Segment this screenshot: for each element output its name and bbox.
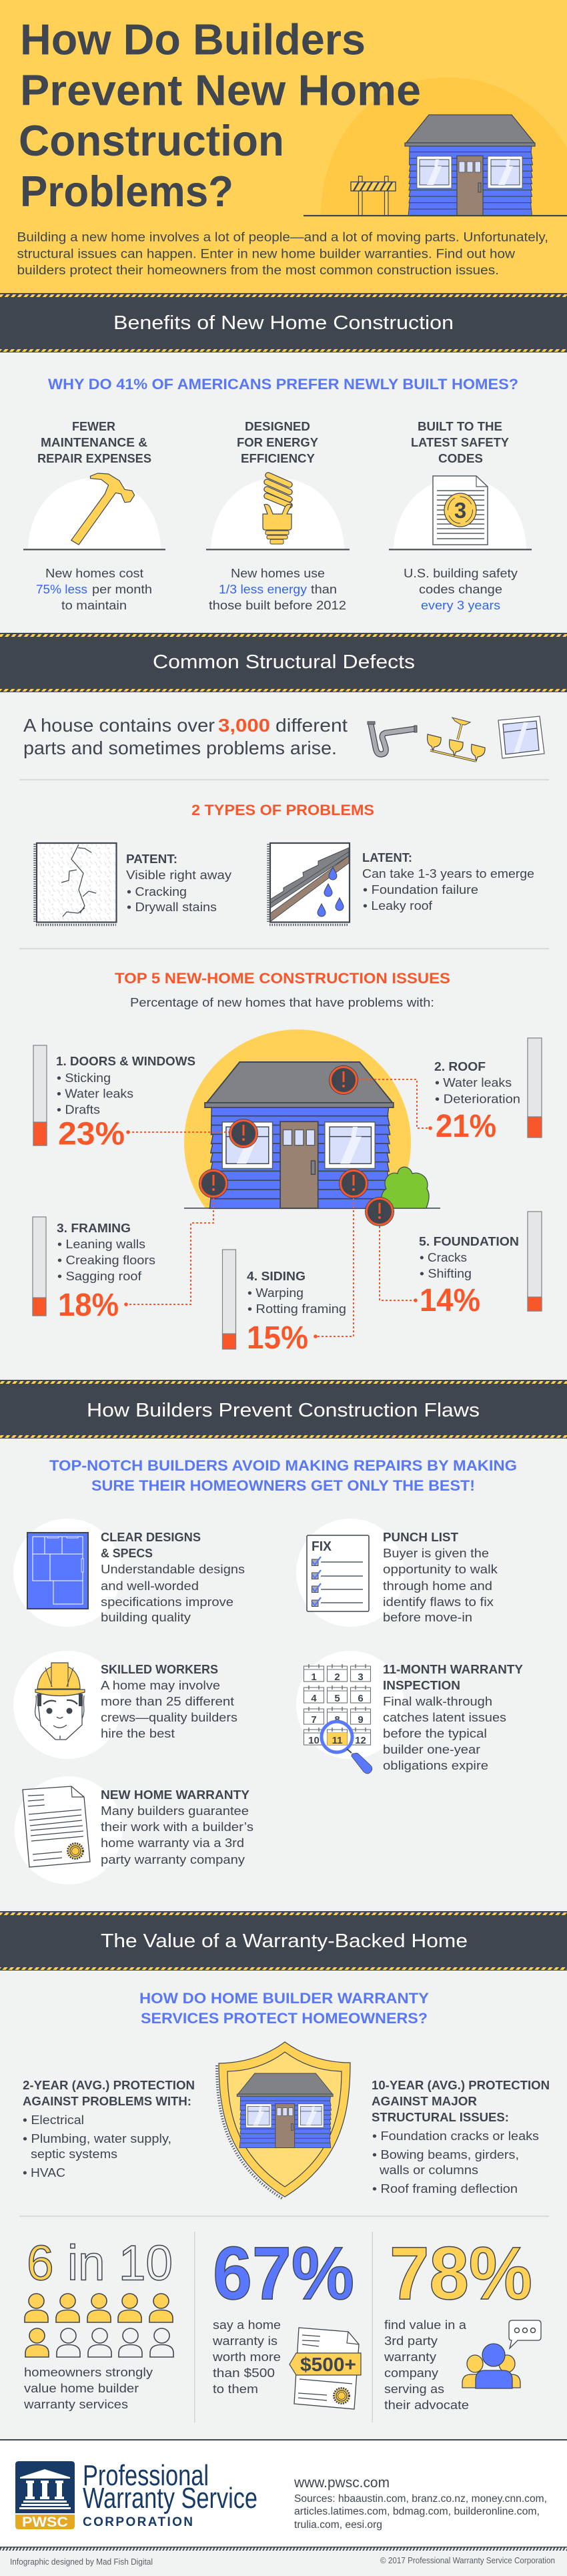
icon: checklist <box>307 1535 369 1611</box>
logo: PWSC: PWSC <box>22 2515 68 2530</box>
panel: fewer maintenance: per month <box>92 582 152 596</box>
panel: fewer maintenance: 75% less <box>36 582 87 596</box>
panel: energy efficiency: New homes use <box>231 566 325 580</box>
icon: alert framing <box>199 1170 228 1198</box>
icon: code document <box>433 476 488 545</box>
gauge 18% <box>33 1217 46 1316</box>
stat: 6 in 10: warranty services <box>23 2397 128 2411</box>
panel: siding: 15% <box>247 1320 308 1356</box>
text block: 3,000 parts: parts and sometimes problems arise. <box>23 738 337 758</box>
icon: cracked wall <box>35 843 116 925</box>
panel: 10-year protection: • Foundation cracks or leaks <box>372 2129 539 2143</box>
icon: road barrier <box>351 176 396 216</box>
panel: 11-month inspection: 11-MONTH WARRANTY <box>383 1663 523 1676</box>
icon: window <box>498 716 544 758</box>
icon: calendar grid <box>304 1664 371 1752</box>
stat: 78%: 3rd party <box>384 2334 438 2348</box>
icon: shrub <box>381 1167 429 1208</box>
icon: hammer <box>71 473 135 545</box>
text block: 3,000 parts <box>23 715 348 758</box>
panel: 11-month inspection <box>296 1651 523 1774</box>
gauge 23% <box>33 1045 47 1145</box>
stat: 78%: 78% <box>390 2232 532 2315</box>
section banner: benefits: Benefits of New Home Construction <box>113 312 454 334</box>
stat: 78%: company <box>384 2366 439 2380</box>
panel: fewer maintenance: MAINTENANCE & <box>41 436 147 449</box>
panel: foundation <box>419 1212 542 1318</box>
panel: safety codes: BUILT TO THE <box>418 420 502 433</box>
panel: safety codes: every 3 years <box>421 598 500 612</box>
gauge 21% <box>528 1038 542 1137</box>
panel: foundation: • Cracks <box>420 1250 467 1264</box>
stat: 6 in 10: homeowners strongly <box>24 2365 153 2379</box>
panel: doors and windows: • Drafts <box>57 1103 100 1116</box>
panel: fewer maintenance: New homes cost <box>45 566 143 580</box>
panel: 10-year protection: 10-YEAR (AVG.) PROTECTION <box>372 2079 550 2092</box>
icon: blueprint <box>27 1533 88 1609</box>
panel: 11-month inspection: before the typical <box>383 1726 487 1740</box>
panel: doors and windows: • Sticking <box>57 1071 111 1085</box>
panel: foundation: 14% <box>420 1283 480 1318</box>
connectors <box>124 1079 432 1338</box>
panel: skilled workers: crews—quality builders <box>101 1710 237 1724</box>
icon: calendar grid: 6 <box>358 1693 364 1704</box>
panel: latent problems: • Leaky roof <box>363 898 433 913</box>
icon: calendar grid: 3 <box>358 1671 364 1683</box>
panel: roof: • Deterioration <box>435 1092 520 1105</box>
icon: calendar grid: 4 <box>311 1693 317 1704</box>
icon: shield with house <box>217 2042 350 2199</box>
icon: code document: 3 <box>454 498 466 523</box>
icon: calendar grid: 7 <box>311 1714 317 1726</box>
panel: patent problems: PATENT: <box>126 852 177 866</box>
panel: skilled workers <box>13 1651 237 1759</box>
header background dome <box>320 77 567 216</box>
panel: framing <box>33 1217 155 1323</box>
footer panel <box>0 2439 567 2547</box>
stat: 78%: warranty <box>384 2350 437 2364</box>
chart: house with problem areas <box>124 1029 440 1338</box>
panel: punch list: through home and <box>383 1579 492 1593</box>
panel: 2-year protection: 2-YEAR (AVG.) PROTECTION <box>23 2079 195 2092</box>
stat: 67% <box>212 2232 361 2409</box>
panel: roof: • Water leaks <box>435 1075 512 1089</box>
panel: punch list: before move-in <box>383 1610 472 1624</box>
panel: 10-year protection: walls or columns <box>379 2163 478 2177</box>
stat: 6 in 10 <box>23 2235 173 2411</box>
icon: calendar grid: 2 <box>334 1671 340 1683</box>
panel: siding <box>223 1250 346 1356</box>
panel: clear designs: Understandable designs <box>101 1562 245 1576</box>
icon: people grid <box>25 2294 173 2357</box>
panel: framing: • Sagging roof <box>57 1269 142 1283</box>
panel: 2-year protection: septic systems <box>31 2147 117 2161</box>
panel: siding: • Warping <box>247 1286 304 1300</box>
panel: new home warranty: Many builders guarantee <box>101 1804 249 1818</box>
panel: energy efficiency <box>206 420 350 612</box>
panel: fewer maintenance: to maintain <box>61 598 127 612</box>
panel: foundation: 5. FOUNDATION <box>419 1235 519 1248</box>
icon: calendar grid: 5 <box>334 1693 340 1704</box>
panel: doors and windows: 23% <box>58 1116 125 1152</box>
icon: calendar grid: 9 <box>358 1714 364 1726</box>
icon: light bulb <box>263 475 292 544</box>
panel: latent problems: • Foundation failure <box>363 882 478 896</box>
panel: punch list: Buyer is given the <box>383 1546 489 1560</box>
icon: calendar grid: 11 <box>332 1735 342 1746</box>
heading: top-notch builders: SURE THEIR HOMEOWNERS GET ONLY THE BEST! <box>91 1477 475 1494</box>
section banner: defects <box>0 633 567 692</box>
icon: $500+ certificate <box>290 2328 361 2409</box>
heading: why 41%: WHY DO 41% OF AMERICANS PREFER NEWLY BUILT HOMES? <box>48 376 518 393</box>
logo wordmark: CORPORATION <box>83 2515 193 2529</box>
logo wordmark <box>83 2459 257 2529</box>
panel: clear designs: specifications improve <box>101 1595 233 1609</box>
panel: safety codes: CODES <box>438 452 483 465</box>
credit line: Infographic designed by Mad Fish Digital <box>10 2557 153 2567</box>
panel: fewer maintenance: FEWER <box>72 420 115 433</box>
heading: top-notch builders <box>49 1457 517 1494</box>
panel: 10-year protection: STRUCTURAL ISSUES: <box>372 2111 509 2124</box>
panel: energy efficiency: 1/3 less energy <box>219 582 308 596</box>
panel: 11-month inspection: obligations expire <box>383 1758 488 1772</box>
logo: PWSC <box>15 2461 75 2530</box>
panel: doors and windows: 1. DOORS & WINDOWS <box>56 1055 195 1068</box>
logo wordmark: Warranty Service <box>83 2482 257 2515</box>
icon: calendar grid: 8 <box>334 1714 340 1726</box>
panel: patent problems: Visible right away <box>126 868 232 882</box>
panel: punch list <box>296 1519 498 1627</box>
panel: roof: 21% <box>436 1109 496 1144</box>
panel: 10-year protection: AGAINST MAJOR <box>372 2095 477 2108</box>
icon: new house <box>405 115 535 216</box>
panel: new home warranty <box>15 1776 253 1884</box>
panel: foundation: • Shifting <box>420 1266 472 1280</box>
panel: 11-month inspection: INSPECTION <box>383 1679 460 1692</box>
icon: warranty document <box>23 1786 90 1867</box>
heading: how do warranties protect: SERVICES PROTECT HOMEOWNERS? <box>141 2010 428 2027</box>
intro paragraph: structural issues can happen. Enter in new home builder warranties. Find out how <box>17 247 515 262</box>
icon: chandelier <box>428 718 485 761</box>
panel: clear designs: & SPECS <box>101 1547 153 1560</box>
panel: energy efficiency: DESIGNED <box>245 420 310 433</box>
panel: 2-year protection: • Plumbing, water supply, <box>23 2131 171 2145</box>
panel: safety codes: LATEST SAFETY <box>411 436 509 449</box>
section banner: value: The Value of a Warranty-Backed Home <box>101 1930 468 1952</box>
website and sources: trulia.com, eesi.org <box>294 2519 382 2531</box>
icon: alert window <box>229 1119 257 1148</box>
stat: 78%: serving as <box>384 2382 444 2396</box>
panel: 2-year protection: • HVAC <box>23 2165 65 2179</box>
stat: 67%: 67% <box>213 2232 354 2315</box>
panel: framing: • Leaning walls <box>57 1237 145 1251</box>
panel: energy efficiency: those built before 2012 <box>209 598 346 612</box>
icon: alert foundation <box>366 1198 394 1226</box>
panel: energy efficiency: FOR ENERGY <box>237 436 318 449</box>
panel: 10-year protection: • Roof framing deflection <box>372 2181 518 2196</box>
title <box>19 15 421 216</box>
panel: 10-year protection: • Bowing beams, girders, <box>372 2147 519 2161</box>
icon: $500+ certificate: $500+ <box>300 2354 356 2376</box>
logo wordmark: Professional <box>83 2459 209 2492</box>
stat: 78%: their advocate <box>384 2398 469 2412</box>
icon: alert siding <box>339 1170 368 1198</box>
website and sources: Sources: hbaaustin.com, branz.co.nz, money.cnn.com, <box>294 2493 547 2505</box>
text block: 3,000 parts: different <box>275 715 348 736</box>
panel: latent problems: Can take 1-3 years to emerge <box>362 866 534 880</box>
gauge 15% <box>223 1250 236 1349</box>
panel: punch list: PUNCH LIST <box>383 1531 458 1544</box>
panel: clear designs: CLEAR DESIGNS <box>101 1531 201 1544</box>
panel: punch list: identify flaws to fix <box>383 1595 494 1609</box>
panel: 11-month inspection: builder one-year <box>383 1742 480 1756</box>
section banner: prevention: How Builders Prevent Construction Flaws <box>87 1400 480 1421</box>
panel: skilled workers: hire the best <box>101 1726 175 1740</box>
panel: energy efficiency: than <box>311 582 337 596</box>
icon: checklist: FIX <box>312 1539 332 1554</box>
panel: roof: 2. ROOF <box>434 1060 486 1073</box>
panel: 2-year protection <box>23 2079 195 2179</box>
panel: new home warranty: their work with a builder’s <box>101 1820 253 1834</box>
icon: pipe <box>368 722 417 754</box>
stat: 67%: say a home <box>213 2318 281 2332</box>
icon: calendar grid: 1 <box>311 1671 317 1683</box>
panel: energy efficiency: EFFICIENCY <box>241 452 315 465</box>
panel: punch list: opportunity to walk <box>383 1562 498 1576</box>
title: How Do Builders <box>20 15 366 64</box>
panel: skilled workers: more than 25 different <box>101 1694 234 1708</box>
panel: 10-year protection <box>372 2079 550 2196</box>
website and sources: articles.latimes.com, bdmag.com, builderonline.com, <box>294 2506 540 2517</box>
panel: siding: 4. SIDING <box>247 1270 306 1283</box>
panel: safety codes <box>389 420 532 612</box>
stat: 78%: find value in a <box>384 2318 467 2332</box>
panel: latent problems: LATENT: <box>362 851 412 864</box>
panel: framing: 3. FRAMING <box>57 1222 131 1235</box>
stat: 6 in 10: 6 in 10 <box>27 2235 173 2291</box>
website and sources: www.pwsc.com <box>294 2475 390 2491</box>
panel: roof <box>434 1038 542 1144</box>
panel: framing: 18% <box>58 1288 119 1323</box>
panel: clear designs: building quality <box>101 1610 191 1624</box>
panel: doors and windows: • Water leaks <box>57 1087 133 1100</box>
panel: siding: • Rotting framing <box>247 1302 346 1316</box>
stat: 67%: warranty is <box>212 2334 277 2348</box>
heading: how do warranties protect <box>139 1990 429 2027</box>
stat: 6 in 10: value home builder <box>24 2381 139 2395</box>
panel: safety codes: U.S. building safety <box>404 566 518 580</box>
panel: new home warranty: NEW HOME WARRANTY <box>101 1788 249 1802</box>
panel: patent problems: • Drywall stains <box>127 900 217 914</box>
panel: clear designs: and well-worded <box>101 1579 199 1593</box>
intro paragraph: Building a new home involves a lot of people—and a lot of moving parts. Unfortunately, <box>17 231 548 244</box>
stat: 67%: worth more <box>212 2350 281 2364</box>
icon: worker <box>35 1663 85 1740</box>
panel: new home warranty: home warranty via a 3rd <box>101 1836 244 1850</box>
icon: leaking roof <box>268 843 350 925</box>
panel: fewer maintenance <box>23 420 165 612</box>
panel: 2-year protection: AGAINST PROBLEMS WITH: <box>23 2095 191 2108</box>
section banner: defects: Common Structural Defects <box>153 652 415 673</box>
panel: 11-month inspection: Final walk-through <box>383 1694 492 1708</box>
panel: skilled workers: A home may involve <box>101 1678 220 1692</box>
stat: 67%: to them <box>213 2382 258 2396</box>
panel: framing: • Creaking floors <box>57 1253 155 1267</box>
heading: 2 types of problems: 2 TYPES OF PROBLEMS <box>191 802 374 818</box>
panel: fewer maintenance: REPAIR EXPENSES <box>37 452 151 465</box>
section banner: benefits <box>0 293 567 352</box>
panel: new home warranty: party warranty company <box>101 1852 245 1866</box>
header panel <box>0 0 567 293</box>
panel: patent problems: • Cracking <box>127 884 187 898</box>
icon: calendar grid: 10 <box>308 1735 320 1746</box>
stat: 67%: than $500 <box>213 2366 275 2380</box>
panel: 2-year protection: • Electrical <box>23 2113 84 2127</box>
heading: top 5 issues: TOP 5 NEW-HOME CONSTRUCTION ISSUES <box>115 970 450 987</box>
icon: alert roof <box>330 1065 358 1095</box>
panel: latent problems <box>268 843 534 925</box>
intro paragraph: builders protect their homeowners from the most common construction issues. <box>17 264 499 278</box>
panel: doors and windows <box>33 1045 195 1152</box>
text block: 3,000 parts: 3,000 <box>218 715 270 736</box>
subheading: Percentage of new homes that have problems with: <box>130 995 434 1009</box>
title: Construction <box>19 116 284 165</box>
heading: top-notch builders: TOP-NOTCH BUILDERS AVOID MAKING REPAIRS BY MAKING <box>49 1457 517 1474</box>
gauge 14% <box>528 1212 542 1311</box>
panel: clear designs <box>13 1519 245 1627</box>
section banner: value <box>0 1911 567 1971</box>
panel: 11-month inspection: catches latent issues <box>383 1710 506 1724</box>
title: Prevent New Home <box>20 65 421 115</box>
intro paragraph <box>17 231 548 278</box>
heading: how do warranties protect: HOW DO HOME BUILDER WARRANTY <box>139 1990 429 2007</box>
section banner: prevention <box>0 1380 567 1439</box>
website and sources <box>294 2475 547 2531</box>
text block: 3,000 parts: A house contains over <box>23 715 215 736</box>
panel: skilled workers: SKILLED WORKERS <box>101 1663 218 1676</box>
icon: calendar grid: 12 <box>355 1735 366 1746</box>
icon: magnifier <box>322 1722 372 1774</box>
icon: advocate group <box>462 2320 541 2388</box>
panel: safety codes: codes change <box>419 582 502 596</box>
stat: 78% <box>384 2232 541 2412</box>
title: Problems? <box>20 167 233 216</box>
panel: patent problems <box>35 843 232 925</box>
